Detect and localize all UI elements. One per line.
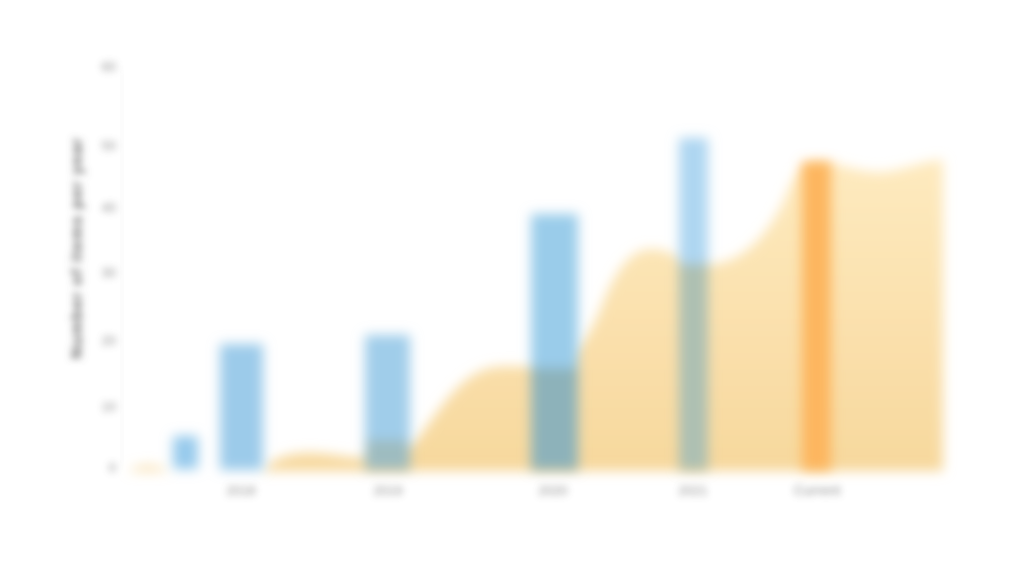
y axis tick labels: 20 bbox=[102, 333, 116, 348]
y axis tick labels: 10 bbox=[102, 399, 116, 414]
x axis labels: 2018 bbox=[227, 483, 255, 498]
y axis tick labels: 60 bbox=[102, 59, 116, 74]
x axis labels bbox=[227, 482, 840, 498]
bar 6 bbox=[802, 162, 831, 470]
x axis labels: 2019 bbox=[374, 483, 402, 498]
bar 3 bbox=[365, 335, 410, 470]
y axis tick labels bbox=[102, 59, 116, 475]
bar 5 bbox=[679, 138, 708, 470]
y axis line bbox=[121, 68, 123, 468]
bar 1 bbox=[173, 436, 198, 469]
y axis title: Number of items per year bbox=[69, 137, 86, 359]
bars bbox=[173, 138, 831, 470]
x axis labels: Current bbox=[794, 482, 840, 498]
x axis labels: 2021 bbox=[679, 483, 707, 498]
y axis tick labels: 30 bbox=[102, 265, 116, 280]
y axis tick labels: 50 bbox=[102, 138, 116, 153]
y axis tick labels: 40 bbox=[102, 200, 116, 215]
bar 4 bbox=[531, 214, 578, 470]
x axis labels: 2020 bbox=[539, 483, 567, 498]
bar 2 bbox=[220, 344, 263, 470]
y axis tick labels: 0 bbox=[109, 460, 116, 475]
area series bbox=[128, 160, 943, 471]
